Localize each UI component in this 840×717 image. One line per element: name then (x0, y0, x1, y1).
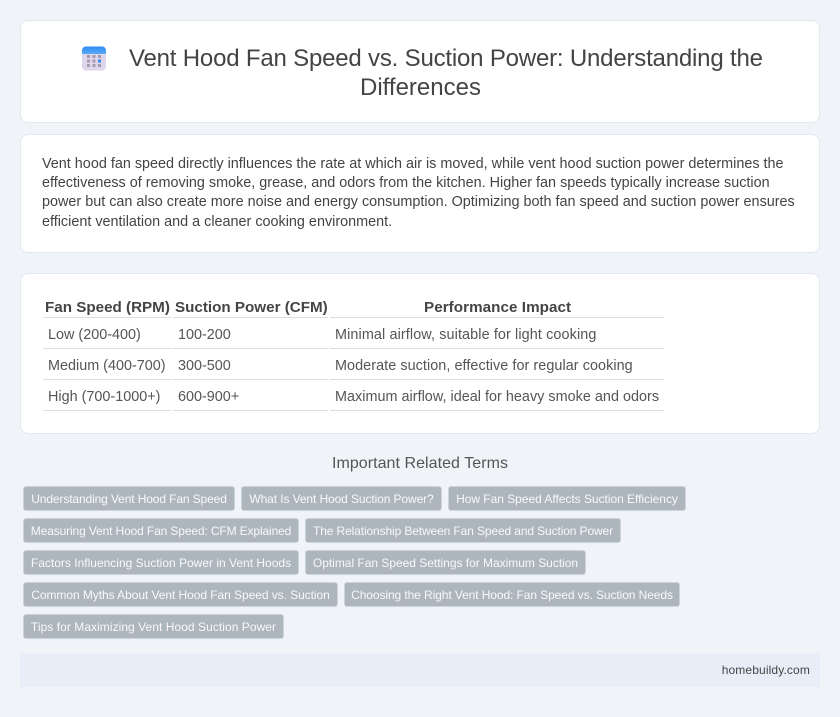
table: fan speed vs suction power: 300-500 (178, 358, 231, 374)
intro text: effectiveness of removing smoke, grease, and odors from the kitchen. Higher fan speeds typically increase suction (42, 175, 770, 191)
heading: related terms: Important Related Terms (332, 455, 508, 472)
table: fan speed vs suction power (43, 299, 664, 411)
footer bar (20, 654, 820, 687)
related term tags (23, 486, 686, 639)
table: fan speed vs suction power: Low (200-400) (48, 327, 141, 343)
intro text: Vent hood fan speed directly influences the rate at which air is moved, while vent hood suction power determines the (42, 156, 784, 172)
title: Differences (360, 74, 481, 101)
table: fan speed vs suction power: 600-900+ (178, 389, 239, 405)
table: fan speed vs suction power: Moderate suction, effective for regular cooking (335, 358, 633, 374)
panel: intro paragraph (20, 134, 820, 253)
related term tags: How Fan Speed Affects Suction Efficiency (456, 492, 678, 506)
intro text: efficient ventilation and a cleaner cooking environment. (42, 214, 392, 230)
related term tags: Optimal Fan Speed Settings for Maximum Suction (313, 556, 578, 570)
panel: comparison table (20, 273, 820, 434)
table: fan speed vs suction power: Performance Impact (424, 299, 571, 316)
related term tags: Common Myths About Vent Hood Fan Speed vs. Suction (31, 588, 330, 602)
table: fan speed vs suction power: High (700-1000+) (48, 389, 160, 405)
icon: calendar (82, 46, 106, 70)
intro text (42, 156, 795, 230)
related term tags: What Is Vent Hood Suction Power? (249, 492, 434, 506)
title: Vent Hood Fan Speed vs. Suction Power: Understanding the (129, 45, 763, 72)
related term tags: Choosing the Right Vent Hood: Fan Speed vs. Suction Needs (351, 588, 673, 602)
title (129, 45, 763, 101)
footer source: homebuildy.com (722, 663, 810, 677)
table: fan speed vs suction power: Fan Speed (RPM) (45, 299, 170, 316)
related term tags: Factors Influencing Suction Power in Vent Hoods (31, 556, 291, 570)
related term tags: The Relationship Between Fan Speed and Suction Power (313, 524, 613, 538)
table: fan speed vs suction power: Medium (400-700) (48, 358, 166, 374)
table: fan speed vs suction power: Maximum airflow, ideal for heavy smoke and odors (335, 389, 659, 405)
related term tags: Understanding Vent Hood Fan Speed (31, 492, 227, 506)
intro text: power but can also create more noise and energy consumption. Optimizing both fan speed and suction power ensures (42, 194, 795, 210)
table: fan speed vs suction power: Minimal airflow, suitable for light cooking (335, 327, 596, 343)
table: fan speed vs suction power: 100-200 (178, 327, 231, 343)
related term tags: Measuring Vent Hood Fan Speed: CFM Explained (31, 524, 291, 538)
table: fan speed vs suction power: Suction Power (CFM) (175, 299, 328, 316)
panel: title header (20, 20, 820, 123)
related term tags: Tips for Maximizing Vent Hood Suction Power (31, 620, 276, 634)
